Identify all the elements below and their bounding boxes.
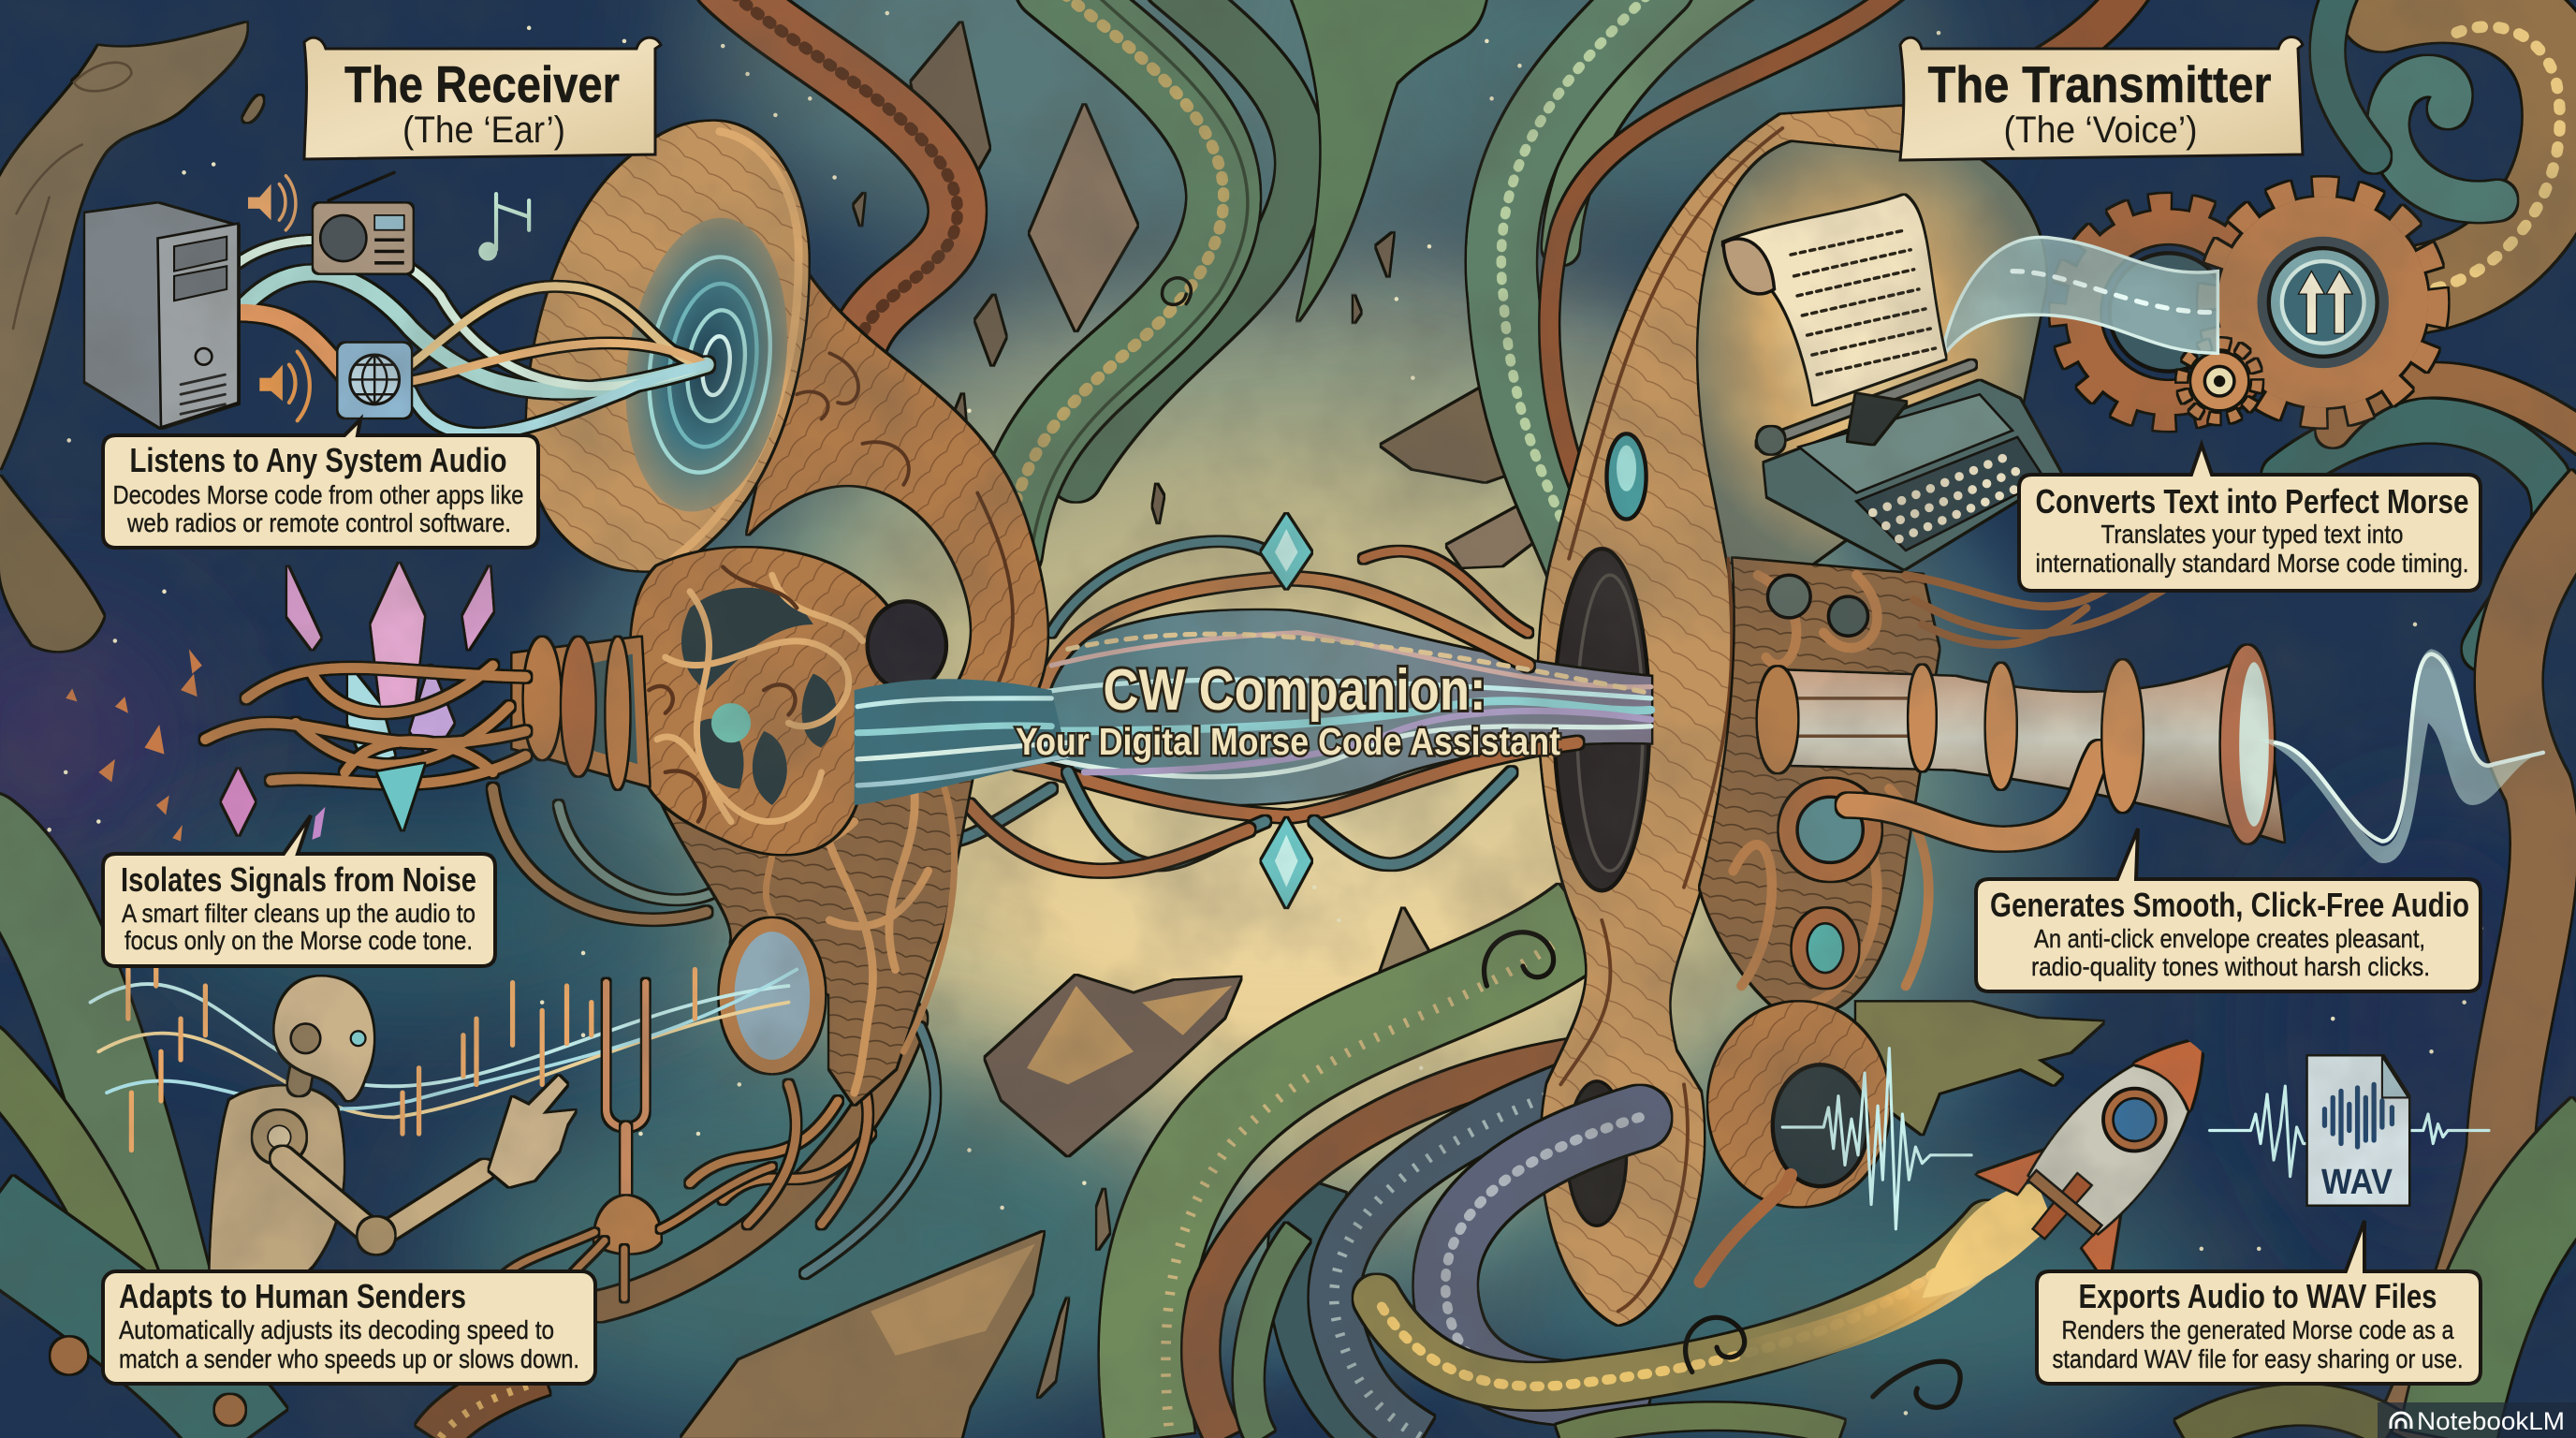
heading: The Receiver banner: (The ‘Ear’) [402,110,565,151]
icon: flowing text ribbon [1945,237,2217,353]
portal copper frame [1018,541,1577,865]
panel: gears [2060,187,2438,420]
connector tube with rings [513,638,649,785]
icon: robot figure [211,976,575,1299]
dome glow behind paper [1670,118,2045,567]
vine: top-right spiral with glowing runes [2327,0,2567,292]
jewel: top [1262,514,1311,588]
icon: computer tower [85,204,238,427]
callout: Adapts to Human Senders [103,1271,595,1384]
callout: Converts Text into Perfect Morse: Translates your typed text into [2100,520,2404,549]
signal streams [1010,633,1651,777]
column inner contour lines [1560,128,1782,1312]
rock: floating centre-left [986,976,1240,1155]
watermark: NotebookLM: NotebookLM [2417,1407,2565,1435]
callout: Exports Audio to WAV Files: standard WAV file for easy sharing or use. [2052,1344,2464,1373]
chart: robot input waves [91,961,797,1151]
teal jewel [1793,909,1858,988]
icon: tuning fork on stand [506,983,772,1299]
jewel [1606,433,1647,520]
callout: Listens to Any System Audio: Listens to Any System Audio [129,441,507,479]
panel: root column mass [649,772,973,1104]
panel: right tall copper column arch [1539,105,2045,1325]
chart: streams entering portal [855,679,1068,805]
main gear [2208,187,2438,418]
chart: glowing output wave [2259,649,2543,863]
jewel: bottom [1262,818,1311,907]
vine: green foliage, top centre [1290,0,1486,320]
rear gear [2060,204,2277,420]
upper hole [1554,549,1649,890]
icon: rocket with fins and porthole [1974,984,2267,1288]
icon: speaker sound lower [259,352,310,420]
callout: Isolates Signals from Noise [103,815,495,966]
panel: left bottom vines [0,838,542,1438]
icon: radio [314,172,413,272]
callout: Converts Text into Perfect Morse: internationally standard Morse code timing. [2035,549,2469,578]
callout: Generates Smooth, Click-Free Audio [1976,829,2481,991]
rocks: floating right centre [1354,233,1551,1027]
vine: purple ribbon through lower hole [1445,1117,1640,1394]
icon: music notes [480,194,529,258]
rock: bottom centre [681,1190,1109,1438]
vine: green rune ribbons, top centre [1005,0,1301,550]
callout: Generates Smooth, Click-Free Audio: radio-quality tones without harsh clicks. [2031,952,2430,981]
heading: The Transmitter banner [1900,37,2303,160]
rock: left lower driftwood [0,477,104,651]
callout: Exports Audio to WAV Files: Exports Audio to WAV Files [2078,1277,2437,1315]
rocks: floating top centre [855,23,1164,522]
callout: Listens to Any System Audio [103,419,538,548]
callout: Generates Smooth, Click-Free Audio: Generates Smooth, Click-Free Audio [1990,886,2469,924]
panel: right machinery cluster [1701,559,2185,1282]
icon: WAV file [2308,1057,2408,1204]
callout: Isolates Signals from Noise: focus only on the Morse code tone. [124,926,473,955]
callout: Adapts to Human Senders: Automatically adjusts its decoding speed to [119,1315,554,1344]
branches [205,666,526,784]
callout: Exports Audio to WAV Files [2037,1221,2481,1384]
icon: typewriter [1758,365,2060,568]
vine: green ribbons, upper right of centre [1501,0,2136,575]
icon: globe in blue app tile [339,344,411,418]
panel: trumpet pipes [1758,646,2284,843]
icon: oval mirror in root [720,918,825,1073]
title: central CW Companion heading [1016,658,1560,763]
vine: bottom-right green [2185,1134,2576,1438]
lower hole [1567,1081,1627,1225]
panel: crystal nest [66,564,526,842]
callout: Adapts to Human Senders: match a sender who speeds up or slows down. [119,1344,579,1373]
heading: The Transmitter banner: (The ‘Voice’) [2003,110,2198,151]
rock: top-left driftwood [0,23,263,468]
ring with fan inside [1779,779,1881,881]
title: central CW Companion heading: CW Companion: [1103,658,1486,723]
callout: Listens to Any System Audio: web radios or remote control software. [126,508,511,537]
watermark: NotebookLM [2378,1402,2576,1438]
panel: central portal with signal streams [1005,514,1651,907]
title: central CW Companion heading: Your Digital Morse Code Assistant [1016,720,1560,763]
fragments [66,649,202,842]
heading: The Receiver banner: The Receiver [344,55,620,113]
crystals [287,564,493,764]
icon: speaker sound top [248,176,296,230]
lower large ring and olive claw [1856,1003,2103,1134]
vine: brown rune ribbon, top centre [723,0,958,345]
vine: bottom centre green and brown bundles [1144,920,1618,1438]
callout: Isolates Signals from Noise: A smart filter cleans up the audio to [122,899,476,928]
callout: Exports Audio to WAV Files: Renders the generated Morse code as a [2061,1315,2454,1344]
callout: Isolates Signals from Noise: Isolates Signals from Noise [121,860,476,899]
gear arrows [2298,271,2352,333]
heading: The Receiver banner [304,37,661,159]
label: WAV on file icon: WAV [2321,1163,2393,1202]
chart: rocket audio waveforms [1782,1049,2489,1229]
callout: Converts Text into Perfect Morse [2019,445,2481,591]
callout: Adapts to Human Senders: Adapts to Human Senders [119,1277,466,1315]
vine: bottom centre blue-grey rune ribbon [1334,1084,1577,1438]
small gear [2182,344,2258,419]
icon: paper scroll [1723,196,1945,404]
panel: root system below trunk [493,788,1249,1306]
icon: system audio wires [238,240,707,433]
icon: small curl scrolls [1485,932,1960,1407]
vine: right side teal and brown [2284,380,2576,1438]
panel: left gramophone horn [527,122,1047,731]
panel: filigree trunk [513,548,946,854]
callout: Converts Text into Perfect Morse: Converts Text into Perfect Morse [2035,482,2469,521]
heading: The Transmitter banner: The Transmitter [1928,55,2271,113]
icon: vortex swirl [637,249,783,480]
exhaust: gold rune ribbon trail [1377,1183,2054,1438]
callout: Generates Smooth, Click-Free Audio: An anti-click envelope creates pleasant, [2034,924,2425,953]
callout: Listens to Any System Audio: Decodes Morse code from other apps like [112,480,524,509]
